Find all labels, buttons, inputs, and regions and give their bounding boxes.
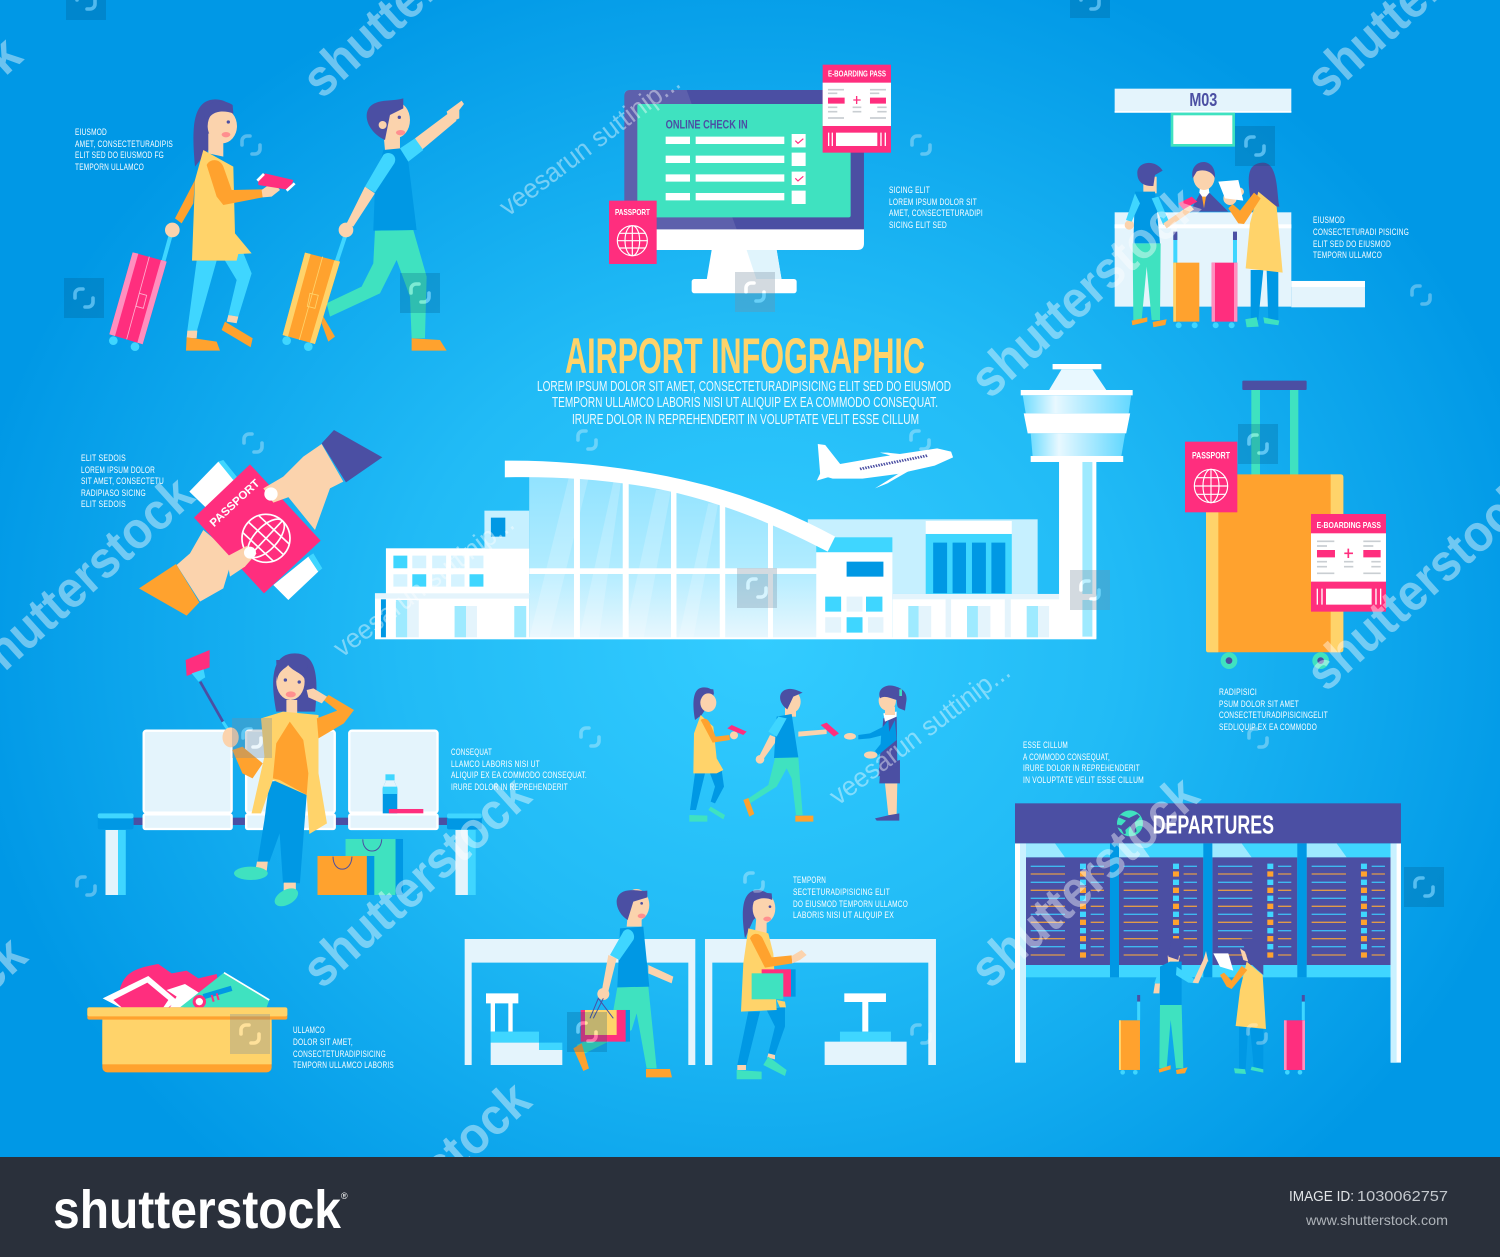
- text: check-in: LOREM IPSUM DOLOR SIT: [889, 197, 977, 207]
- passport: PASSPORT: [615, 207, 650, 217]
- thumbs: [227, 477, 290, 577]
- text: seats: CONSEQUAT: [451, 747, 492, 757]
- passport: PASSPORT: [1192, 450, 1230, 460]
- shutterstock watermarks: shutterstock: [291, 765, 542, 999]
- subtitle: [537, 378, 951, 428]
- text: suitcase: PSUM DOLOR SIT AMET: [1219, 699, 1299, 709]
- tray: [87, 1007, 287, 1072]
- upper hand and sleeve: [277, 430, 382, 530]
- registered mark: ®: [341, 1191, 348, 1201]
- text: travellers: AMET, CONSECTETURADIPIS: [75, 139, 173, 149]
- selfie woman: [222, 653, 354, 910]
- passport: [609, 201, 657, 264]
- boarding pass: [823, 65, 891, 153]
- image id: IMAGE ID:: [1289, 1188, 1354, 1205]
- passport: PASSPORT: [208, 478, 262, 530]
- glass hall: [529, 470, 818, 638]
- subtitle: TEMPORN ULLAMCO LABORIS NISI UT ALIQUIP EX EA COMMODO CONSEQUAT.: [552, 394, 938, 411]
- panel: check-in counter M03: [1115, 89, 1365, 328]
- lower hand and sleeve: [139, 530, 233, 616]
- man pointing with orange suitcase: [282, 98, 464, 351]
- selfie stick: [186, 650, 228, 730]
- shopping bags: [317, 839, 403, 895]
- text: suitcase: CONSECTETURADIPISICINGELIT: [1219, 710, 1328, 720]
- text: seats: ALIQUIP EX EA COMMODO CONSEQUAT.: [451, 770, 587, 780]
- text: counter: TEMPORN ULLAMCO: [1313, 250, 1382, 260]
- woman with shopping bags: [737, 890, 807, 1079]
- airplane: [817, 444, 953, 488]
- airport terminal illustration: [375, 364, 1133, 639]
- website: www.shutterstock.com: [1305, 1212, 1448, 1228]
- text: passport: [81, 453, 164, 509]
- man with passport: [743, 689, 839, 822]
- shutterstock watermarks: shutterstock: [959, 175, 1210, 409]
- text: tray: TEMPORN ULLAMCO LABORIS: [293, 1060, 394, 1070]
- text: departures note: A COMMODO CONSEQUAT,: [1023, 752, 1110, 762]
- suitcase: [1206, 381, 1343, 669]
- customer woman: [1218, 163, 1283, 327]
- passport: [194, 464, 321, 593]
- header: [1015, 803, 1401, 843]
- counter: [1115, 212, 1365, 307]
- text: departures note: IRURE DOLOR IN REPREHENDERIT: [1023, 763, 1140, 773]
- text: passport: ELIT SEDOIS: [81, 499, 126, 509]
- right wing with blue windows: [808, 519, 1038, 594]
- text: passport: LOREM IPSUM DOLOR: [81, 465, 155, 475]
- text: passport: SIT AMET, CONSECTETU: [81, 476, 164, 486]
- gate sign: [1115, 89, 1291, 145]
- text: counter: CONSECTETURADI PISICING: [1313, 227, 1409, 237]
- text: security: LABORIS NISI UT ALIQUIP EX: [793, 910, 894, 920]
- text: seats: IRURE DOLOR IN REPREHENDERIT: [451, 782, 568, 792]
- text: counter: [1313, 215, 1409, 260]
- man reading the board: [1153, 938, 1208, 1074]
- text: counter: ELIT SED DO EIUSMOD: [1313, 239, 1391, 249]
- panel: hands exchanging passport: [139, 430, 382, 616]
- text: security: DO EIUSMOD TEMPORN ULLAMCO: [793, 899, 908, 909]
- bench: [98, 731, 482, 895]
- title: AIRPORT INFOGRAPHIC: [565, 328, 925, 384]
- board: [1015, 843, 1401, 1063]
- text: security: [793, 875, 908, 920]
- shutterstock watermarks: veesarun suttinip...: [328, 508, 520, 663]
- text: tray: DOLOR SIT AMET,: [293, 1037, 353, 1047]
- shutterstock watermarks: veesarun suttinip...: [494, 67, 686, 222]
- suitcases: [1173, 232, 1237, 328]
- belongings: [103, 964, 269, 1008]
- boarding pass: E-BOARDING PASS: [828, 70, 886, 79]
- boarding pass: E-BOARDING PASS: [1317, 520, 1381, 530]
- panel: departures board: [1015, 803, 1401, 1075]
- footer logo: shutterstock: [53, 1180, 342, 1240]
- flight attendant: [844, 686, 907, 821]
- text: tray: [293, 1025, 394, 1070]
- text: departures note: IN VOLUPTATE VELIT ESSE CILLUM: [1023, 775, 1144, 785]
- text: security: TEMPORN: [793, 875, 826, 885]
- text: departures note: [1023, 740, 1144, 785]
- shutterstock watermarks: veesarun suttinip...: [824, 656, 1016, 811]
- text: travellers: EIUSMOD: [75, 127, 107, 137]
- shutterstock watermarks: shutterstock: [959, 765, 1210, 999]
- image id: 1030062757: [1357, 1188, 1448, 1205]
- panel: waiting seats with selfie woman: [98, 650, 482, 910]
- text: travellers: TEMPORN ULLAMCO: [75, 162, 144, 172]
- man with shopping bags: [573, 889, 673, 1077]
- customer man: [1125, 163, 1197, 327]
- control tower: [1021, 364, 1133, 638]
- footer bar: [0, 1157, 1500, 1257]
- centre office block: [816, 537, 892, 638]
- check-in form: [666, 117, 806, 204]
- panel: security tray with belongings: [87, 964, 287, 1072]
- text: travellers: ELIT SED DO EIUSMOD FG: [75, 150, 164, 160]
- panel: online check-in monitor: [609, 65, 891, 293]
- text: suitcase: [1219, 687, 1328, 732]
- panel: suitcase with passport and boarding pass: [1185, 381, 1386, 669]
- text: security: SECTETURADIPISICING ELIT: [793, 887, 890, 897]
- text: tray: CONSECTETURADIPISICING: [293, 1049, 386, 1059]
- curved roof: [505, 461, 835, 552]
- text: seats: LLAMCO LABORIS NISI UT: [451, 759, 540, 769]
- text: passport: RADIPIASO SICING: [81, 488, 146, 498]
- text: travellers: [75, 127, 173, 172]
- header: DEPARTURES: [1153, 809, 1274, 839]
- woman with passport: [689, 687, 747, 822]
- text: counter: EIUSMOD: [1313, 215, 1345, 225]
- text: passport: ELIT SEDOIS: [81, 453, 126, 463]
- text: seats: [451, 747, 587, 792]
- agent: [1190, 162, 1228, 212]
- right concourse: [375, 594, 1096, 639]
- woman with pink suitcase: [109, 99, 295, 351]
- text: suitcase: RADIPISICI: [1219, 687, 1257, 697]
- passport: [1185, 442, 1237, 512]
- text: departures note: ESSE CILLUM: [1023, 740, 1068, 750]
- subtitle: IRURE DOLOR IN REPREHENDERIT IN VOLUPTATE VELIT ESSE CILLUM: [572, 411, 919, 428]
- text: check-in: SICING ELIT: [889, 185, 930, 195]
- gate sign: M03: [1189, 89, 1217, 110]
- travellers walking with luggage: [109, 98, 464, 351]
- left scanner: [486, 993, 562, 1065]
- panel: boarding-pass handover: [689, 686, 907, 822]
- check-in form: ONLINE CHECK IN: [666, 117, 748, 131]
- security frames: [465, 939, 936, 1065]
- text: check-in: SICING ELIT SED: [889, 220, 947, 230]
- subtitle: LOREM IPSUM DOLOR SIT AMET, CONSECTETURADIPISICING ELIT SED DO EIUSMOD: [537, 378, 951, 395]
- panel: security checkpoints: [465, 889, 936, 1079]
- tickets: [189, 460, 322, 600]
- text: suitcase: SEDLIQUIP EX EA COMMODO: [1219, 722, 1317, 732]
- text: check-in: AMET, CONSECTETURADIPI: [889, 208, 983, 218]
- text: check-in: [889, 185, 983, 230]
- woman reading the board: [1213, 938, 1266, 1074]
- suitcases: [1119, 995, 1305, 1075]
- left building: [375, 511, 529, 638]
- watermark logo marks: [64, 0, 1444, 1054]
- text: tray: ULLAMCO: [293, 1025, 325, 1035]
- right scanner: [825, 993, 907, 1065]
- monitor: [624, 90, 864, 293]
- water bottle and ticket: [383, 774, 423, 813]
- boarding pass: [1311, 514, 1386, 612]
